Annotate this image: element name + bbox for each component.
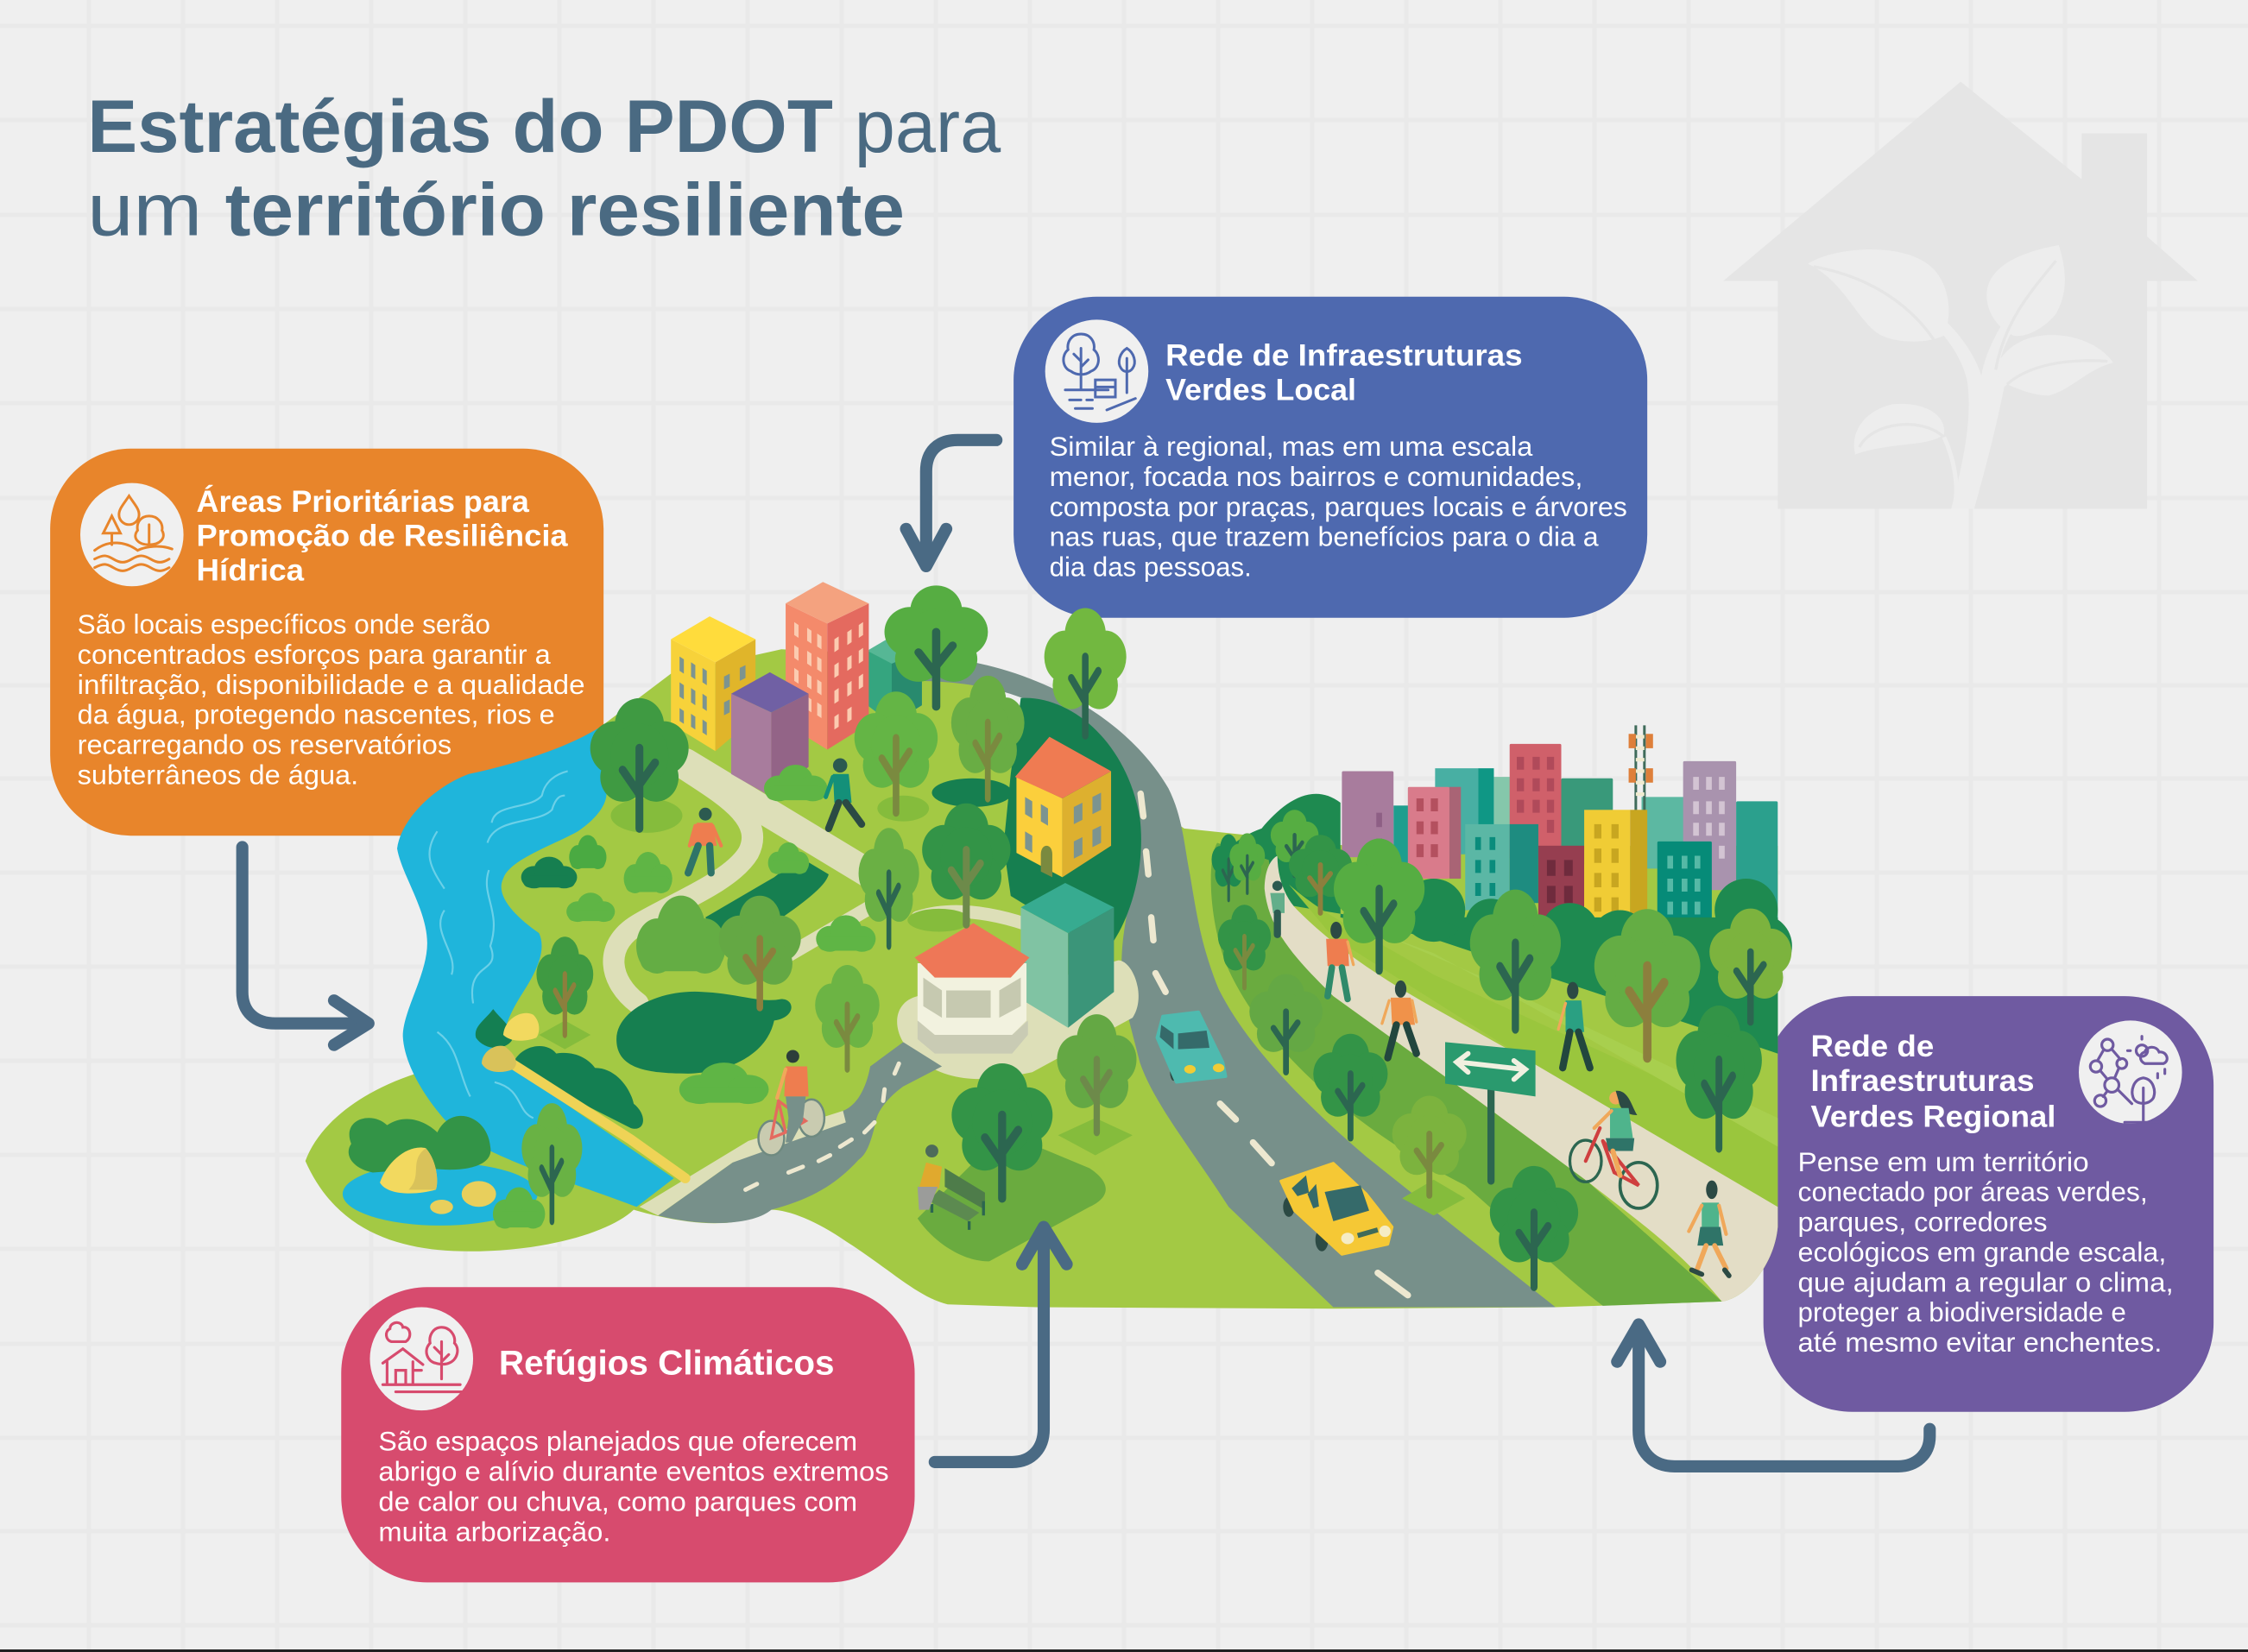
bench with seated person <box>918 1144 985 1230</box>
walkers in the park <box>688 759 862 873</box>
small road <box>658 1042 942 1223</box>
body text: da água, protegendo nascentes, rios e <box>78 699 555 730</box>
panel: Rede de Infraestruturas Verdes Local <box>1013 297 1647 618</box>
icon: house, tree and cloud <box>369 1308 473 1410</box>
heading: Refúgios Climáticos <box>499 1345 835 1383</box>
icon: trees and bench <box>1045 319 1148 423</box>
arrow: regional network to bike path <box>1617 1324 1929 1466</box>
yellow car <box>1281 1163 1392 1254</box>
body text: nas ruas, que trazem benefícios para o dia a <box>1050 521 1599 552</box>
dam path <box>512 1063 685 1178</box>
illustration: city and park landscape <box>306 582 1792 1308</box>
arrow: priority areas to river <box>243 847 369 1045</box>
dark bush along river <box>512 1046 643 1129</box>
body text: abrigo e alívio durante eventos extremos <box>378 1456 889 1487</box>
panel: Refúgios Climáticos <box>341 1287 915 1582</box>
panel: Rede de Infraestruturas Verdes Regional <box>1764 996 2213 1412</box>
island bushes <box>349 1116 490 1172</box>
body text: ecológicos em grande escala, <box>1798 1236 2166 1267</box>
walkers on bike path <box>1270 881 1729 1276</box>
left isometric buildings <box>671 582 922 797</box>
right skyline buildings <box>1342 725 1778 935</box>
body text: conectado por áreas verdes, <box>1798 1176 2148 1207</box>
body text: Similar à regional, mas em uma escala <box>1050 431 1533 462</box>
cyclist on park path <box>759 1050 824 1156</box>
body text: São locais específicos onde serão <box>78 608 490 640</box>
panel: Áreas Prioritárias <box>50 449 603 835</box>
yellow house <box>1015 737 1111 877</box>
river ripples <box>429 771 568 1118</box>
body text: menor, focada nos bairros e comunidades, <box>1050 461 1582 492</box>
body text: Pense em um território <box>1798 1146 2089 1177</box>
lawn shadows under trees <box>539 796 1465 1215</box>
bushes <box>493 765 875 1229</box>
title <box>87 85 1001 251</box>
title: Estratégias do PDOT <box>87 85 833 168</box>
heading: Verdes Regional <box>1810 1100 2055 1133</box>
gazebo <box>915 923 1029 1054</box>
heading: Hídrica <box>197 554 305 588</box>
antenna <box>1629 725 1653 811</box>
arrow: climate refuges to park <box>935 1227 1067 1462</box>
trees <box>521 585 1791 1287</box>
heading <box>1810 1030 2055 1133</box>
body text: São espaços planejados que oferecem <box>378 1426 857 1457</box>
bike path <box>1265 855 1778 1302</box>
arrow: local network to illustration <box>906 440 996 566</box>
river <box>397 727 674 1207</box>
main road <box>918 657 1556 1308</box>
heading <box>197 484 568 588</box>
icon: water and trees <box>80 483 184 586</box>
cyclist on bike path <box>1569 1091 1658 1208</box>
body text <box>378 1426 889 1547</box>
upper lawn band <box>1289 885 1778 1207</box>
forest behind the path <box>1211 794 1792 1054</box>
title: um <box>87 168 202 251</box>
title: território resiliente <box>225 168 905 251</box>
teal car <box>1157 1012 1226 1082</box>
body text: concentrados esforços para garantir a <box>78 639 551 670</box>
body text: proteger a biodiversidade e <box>1798 1296 2126 1327</box>
heading <box>1165 338 1523 407</box>
title: para <box>855 85 1001 168</box>
bike route sign <box>1445 1042 1536 1181</box>
park lawn with bench and tree <box>918 1063 1106 1261</box>
plaza around gazebo <box>897 961 1139 1079</box>
island rocks <box>380 1147 496 1214</box>
ground <box>306 649 1778 1308</box>
rocks and fir <box>476 1009 539 1072</box>
body text: muita arborização. <box>378 1516 610 1547</box>
body text: de calor ou chuva, como parques com <box>378 1485 857 1516</box>
body text: subterrâneos de água. <box>78 759 358 790</box>
heading: Promoção de Resiliência <box>197 520 568 553</box>
body text: recarregando os reservatórios <box>78 729 451 760</box>
body text: infiltração, disponibilidade e a qualidade <box>78 669 585 700</box>
body text: composta por praças, parques locais e árvores <box>1050 491 1627 522</box>
body text: dia das pessoas. <box>1050 552 1252 583</box>
body text <box>1050 431 1627 583</box>
lawn strip beside bike path <box>1211 842 1722 1306</box>
body text: parques, corredores <box>1798 1207 2047 1238</box>
central winding path <box>614 762 1061 1003</box>
heading: Infraestruturas <box>1810 1064 2035 1098</box>
heading: Áreas Prioritárias para <box>197 484 529 519</box>
heading: Verdes Local <box>1165 373 1356 407</box>
dark green lawn patches <box>616 698 1141 1074</box>
road dashes <box>1140 794 1408 1296</box>
heading: Rede de <box>1810 1030 1934 1063</box>
body text <box>78 608 585 790</box>
body text: que ajudam a regular o clima, <box>1798 1266 2174 1297</box>
heading: Rede de Infraestruturas <box>1165 338 1523 372</box>
body text: até mesmo evitar enchentes. <box>1798 1327 2162 1358</box>
teal block <box>1020 883 1114 1028</box>
island pond <box>343 1163 538 1226</box>
watermark: house with plant <box>1723 82 2198 509</box>
body text <box>1798 1146 2174 1358</box>
icon: network, cloud and tree <box>2079 1020 2182 1124</box>
